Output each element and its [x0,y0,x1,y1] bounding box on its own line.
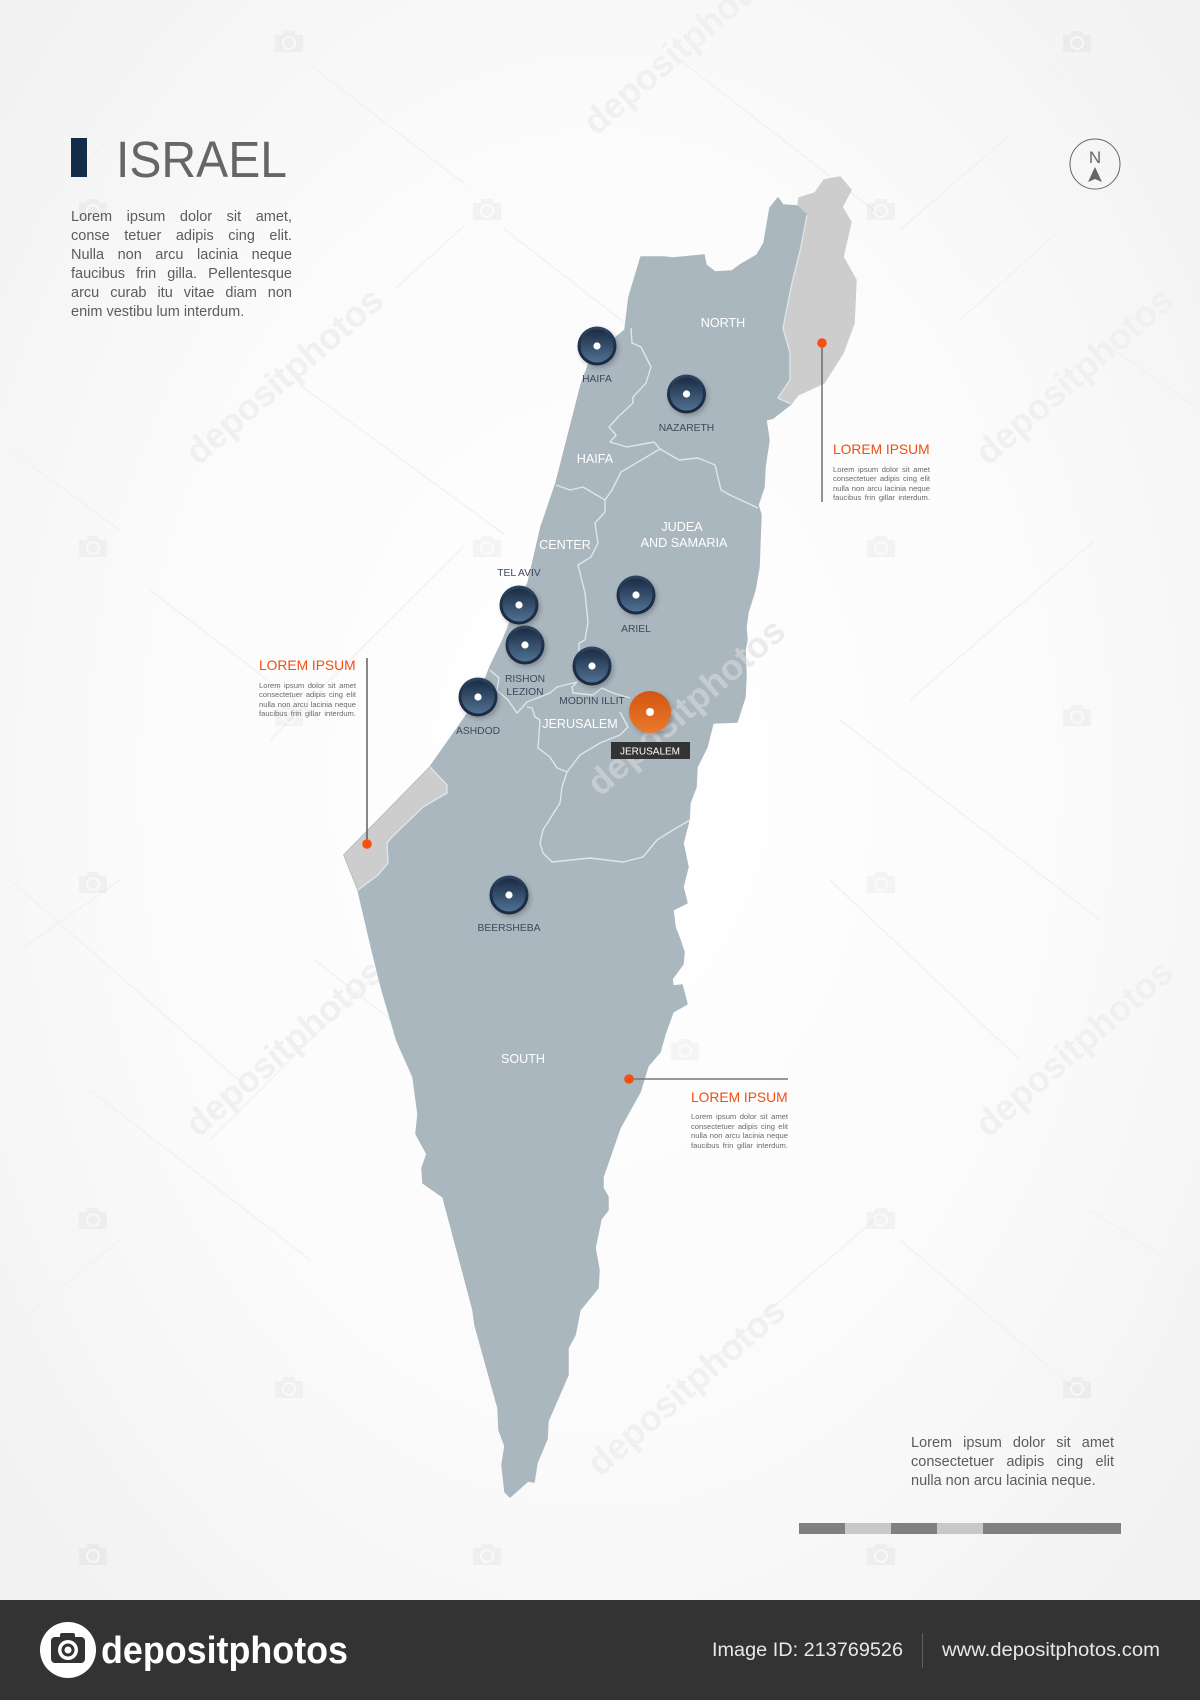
callout text: top right: faucibus frin gillar interdum. [833,493,930,502]
watermark text on background: depositphotos [177,279,391,472]
callout heading: bottom: LOREM IPSUM [691,1090,788,1105]
pin: Modi'in Illit [559,646,625,707]
pin: Nazareth [659,374,714,434]
scale bar [799,1523,1121,1534]
bottom right paragraph: consectetuer adipis cing elit [911,1454,1114,1470]
watermark over map: depositphotos [579,610,793,803]
pin: Ariel: ARIEL [621,624,651,635]
pin: Ashdod: ASHDOD [456,726,500,737]
callout text: bottom: faucibus frin gillar interdum. [691,1141,788,1150]
region label: Judea and Samaria [641,520,728,550]
Israel main landmass [344,198,807,1497]
callout text: top right [833,464,930,502]
pin: Nazareth: NAZARETH [659,423,714,434]
watermark text on background [177,0,1181,1483]
callout: south marker and line [624,1074,788,1084]
pin: Rishon Lezion [505,626,545,698]
map of Israel [344,177,856,1497]
callout heading: left: LOREM IPSUM [259,658,356,673]
region label: Judea and Samaria: AND SAMARIA [641,536,728,550]
pin: Haifa [578,326,616,385]
watermark text on background: depositphotos [967,279,1181,472]
pin: Haifa: HAIFA [582,374,612,385]
bottom right paragraph: Lorem ipsum dolor sit amet [911,1435,1114,1451]
callout text: top right: nulla non arcu lacinia neque [833,484,930,493]
footer logo: depositphotos [101,1630,348,1672]
region label: North: NORTH [701,316,745,330]
watermark text on background: depositphotos [177,951,391,1144]
watermark lines [10,60,1200,1410]
region label: Judea and Samaria: JUDEA [661,520,703,534]
footer url: www.depositphotos.com [941,1640,1160,1661]
pin: Ashdod [456,678,500,737]
watermark text on background: depositphotos [579,1290,793,1483]
pin: Modi'in Illit: MODI'IN ILLIT [559,696,625,707]
compass [1070,139,1120,189]
bottom right paragraph: nulla non arcu lacinia neque. [911,1473,1096,1489]
footer band [0,1600,1200,1700]
pin: Tel Aviv [497,568,541,624]
intro paragraph: Lorem ipsum dolor sit amet, [71,209,292,225]
title: ISRAEL [116,131,287,188]
intro paragraph [71,209,292,320]
region label: Haifa: HAIFA [577,452,614,466]
intro paragraph: conse tetuer adipis cing elit. [71,228,292,244]
footer divider [922,1633,924,1668]
callout heading: top right: LOREM IPSUM [833,442,930,457]
region borders [358,215,807,890]
footer image id: Image ID: 213769526 [712,1640,903,1661]
pin: Beersheba: BEERSHEBA [478,923,541,934]
bottom right paragraph [911,1435,1114,1489]
callout text: bottom: nulla non arcu lacinia neque [691,1131,788,1140]
callout text: bottom: consectetuer adipis cing elit [691,1122,788,1131]
intro paragraph: arcu curab itu vitae diam non [71,285,292,301]
region label: Center: CENTER [539,538,591,552]
callout text: top right: consectetuer adipis cing elit [833,474,930,483]
region label: Jerusalem: JERUSALEM [542,717,618,731]
region: Golan Heights [778,177,856,404]
watermark camera icons [79,31,1091,1565]
watermark text on background: depositphotos [967,951,1181,1144]
capital pin: Jerusalem: JERUSALEM [620,746,680,758]
callout text: left: Lorem ipsum dolor sit amet [259,680,356,690]
intro paragraph: faucibus frin gilla. Pellentesque [71,266,292,282]
pin: Rishon Lezion: LEZION [506,687,544,698]
callout text: left [259,680,356,718]
capital pin: Jerusalem [611,691,690,759]
compass: N [1089,148,1101,167]
footer logo [40,1622,348,1678]
callout text: bottom [691,1112,788,1150]
region label: South: SOUTH [501,1052,545,1066]
pin: Ariel [616,576,656,635]
callout text: top right: Lorem ipsum dolor sit amet [833,464,930,474]
intro paragraph: enim vestibu lum interdum. [71,304,244,320]
callout: Gaza marker and line [362,658,372,849]
region: Gaza [344,767,447,890]
pin: Beersheba [478,876,541,934]
callout text: left: faucibus frin gillar interdum. [259,709,356,718]
title bar [71,138,87,177]
callout text: bottom: Lorem ipsum dolor sit amet [691,1112,788,1121]
callout: Golan marker and line [817,338,827,502]
pin: Rishon Lezion: RISHON [505,674,545,685]
pin: Tel Aviv: TEL AVIV [497,568,541,579]
callout text: left: consectetuer adipis cing elit [259,690,356,699]
callout text: left: nulla non arcu lacinia neque [259,700,356,709]
intro paragraph: Nulla non arcu lacinia neque [71,247,292,263]
